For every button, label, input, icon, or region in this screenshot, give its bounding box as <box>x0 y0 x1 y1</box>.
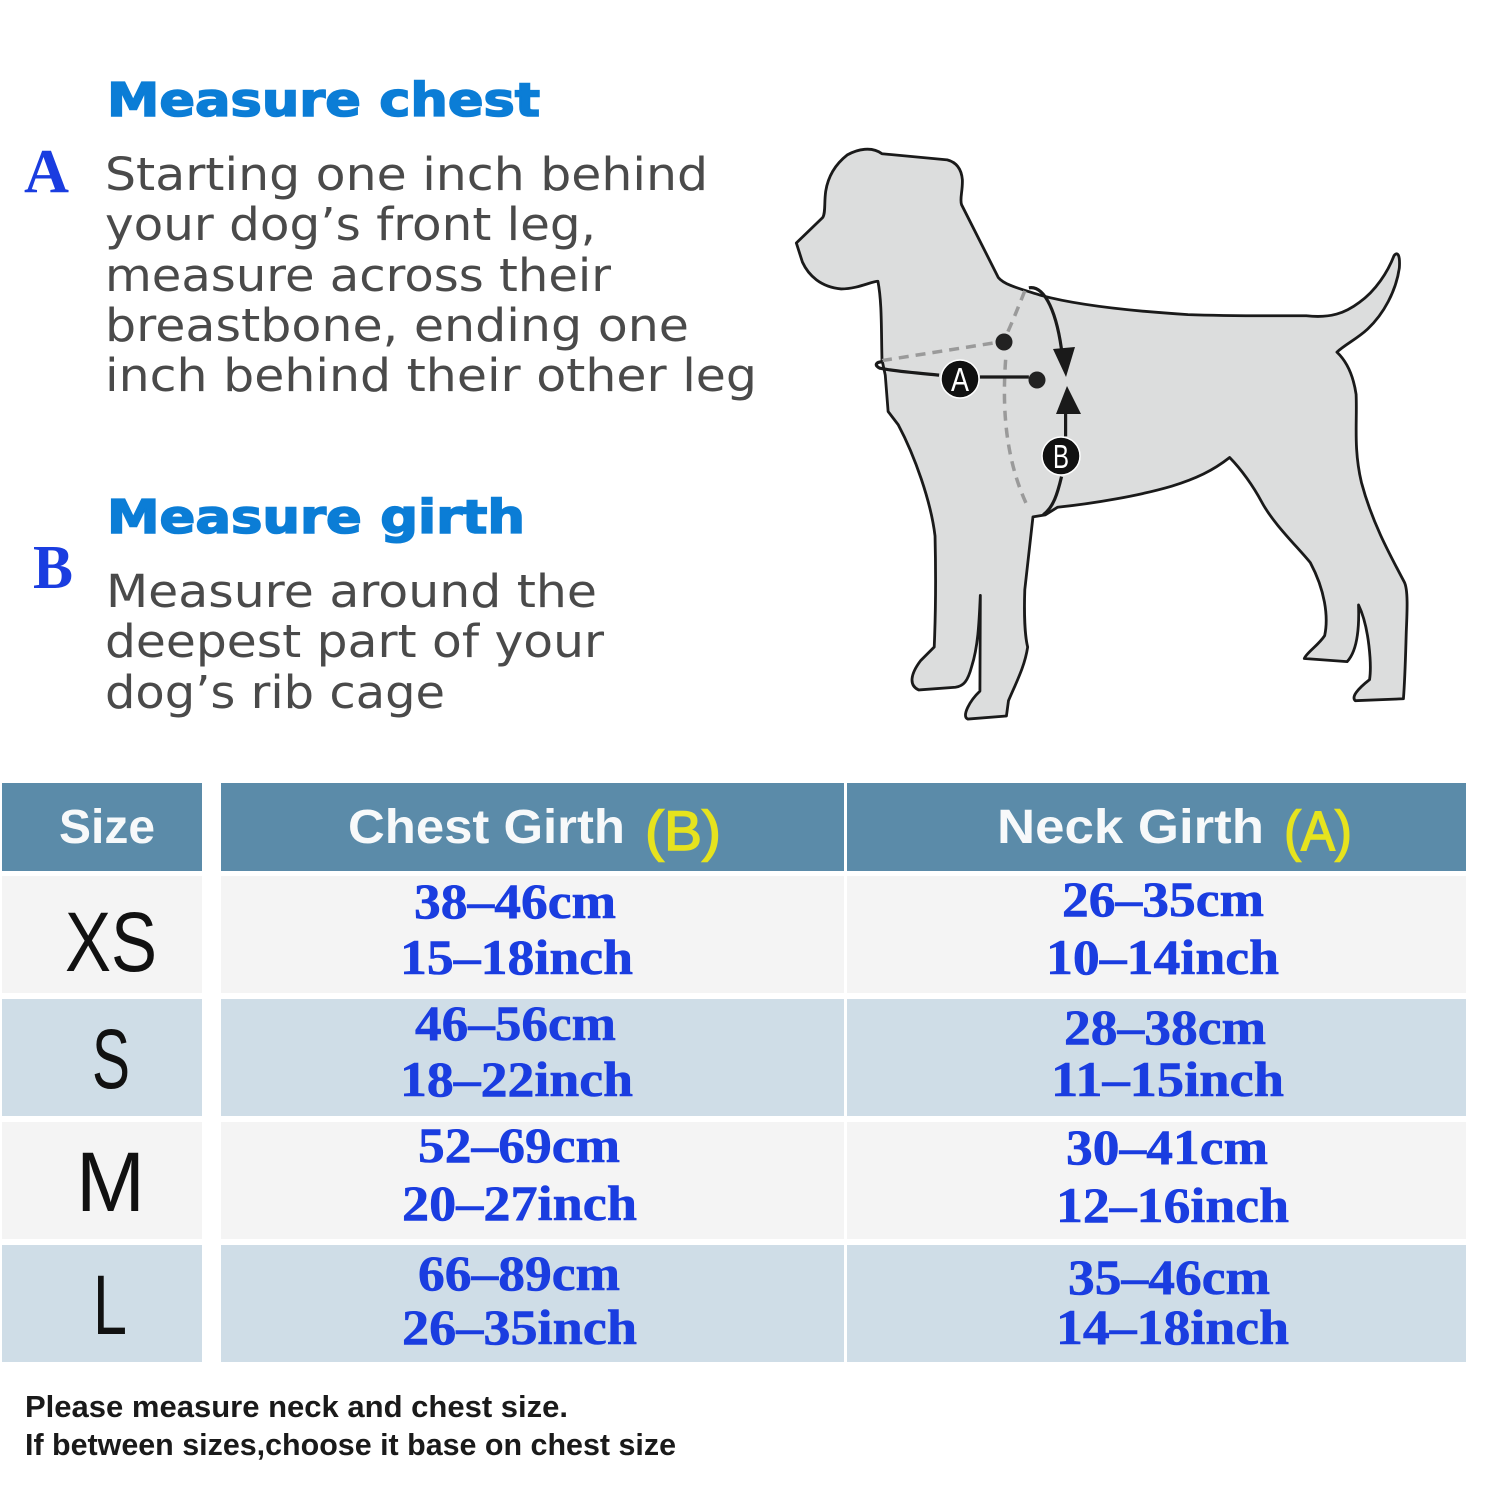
row: XS: 15–18inch <box>400 929 633 985</box>
arrow: up <box>1056 386 1081 414</box>
row: XS: 26–35cm <box>1062 871 1264 927</box>
row: L <box>2 1245 1466 1362</box>
table header row: Chest Girth <box>348 801 625 854</box>
dog diagram <box>796 149 1407 719</box>
row: M: 20–27inch <box>402 1175 637 1231</box>
arrow: down <box>1053 347 1075 377</box>
text block: girth instructions: deepest part of your <box>105 615 605 668</box>
heading: measure chest: Measure chest <box>107 73 540 127</box>
row: XS: 38–46cm <box>414 873 616 929</box>
row: L: 35–46cm <box>1068 1249 1270 1305</box>
row: S: 28–38cm <box>1064 999 1266 1055</box>
icon: dog silhouette <box>796 149 1407 719</box>
table header row: (B) <box>645 799 721 862</box>
marker: A: A <box>951 361 969 398</box>
row: S <box>2 995 1466 1116</box>
text block: chest instructions: measure across their <box>105 249 612 302</box>
table header row: (A) <box>1284 799 1352 862</box>
row: S: 11–15inch <box>1051 1051 1284 1107</box>
row: S: S <box>92 1012 130 1106</box>
table header row <box>2 783 1466 871</box>
row: M: 12–16inch <box>1056 1177 1289 1233</box>
row: S: 18–22inch <box>400 1051 633 1107</box>
row: M: 30–41cm <box>1066 1119 1268 1175</box>
row: M: M <box>76 1135 145 1229</box>
size table <box>2 783 1466 1362</box>
row: M: 52–69cm <box>418 1117 620 1173</box>
text block: girth instructions <box>105 565 605 719</box>
row: XS <box>2 871 1466 993</box>
table header row: Size <box>59 801 155 854</box>
text block: chest instructions: Starting one inch behind <box>105 148 708 201</box>
letter marker B: B <box>33 534 73 602</box>
marker: B: B <box>1053 438 1069 475</box>
text block: girth instructions: Measure around the <box>106 565 597 618</box>
text block: chest instructions: breastbone, ending one <box>105 299 689 352</box>
row: XS: 10–14inch <box>1046 929 1279 985</box>
footnote: If between sizes,choose it base on chest size <box>25 1427 676 1462</box>
row: M <box>2 1117 1466 1239</box>
heading: measure girth: Measure girth <box>107 490 525 544</box>
row: S: 46–56cm <box>415 995 616 1051</box>
text block: chest instructions: your dog’s front leg, <box>105 198 596 251</box>
dot: upper chest point <box>996 334 1012 350</box>
text block: chest instructions: inch behind their other leg <box>105 349 757 402</box>
row: XS: XS <box>65 895 157 989</box>
marker: B <box>1042 437 1080 475</box>
row: L: 14–18inch <box>1056 1299 1289 1355</box>
text block: chest instructions <box>105 148 757 402</box>
letter marker A: A <box>24 138 69 206</box>
footnote <box>25 1389 676 1462</box>
table header row: Neck Girth <box>997 801 1264 854</box>
text block: girth instructions: dog’s rib cage <box>105 666 445 719</box>
marker: A <box>941 360 979 398</box>
row: L: 66–89cm <box>418 1245 620 1301</box>
dot: lower chest point <box>1028 372 1046 388</box>
panel: measure girth instructions <box>33 490 605 719</box>
row: L: 26–35inch <box>402 1299 637 1355</box>
row: L: L <box>93 1258 127 1352</box>
footnote: Please measure neck and chest size. <box>25 1389 568 1424</box>
panel: measure chest instructions <box>24 73 757 402</box>
